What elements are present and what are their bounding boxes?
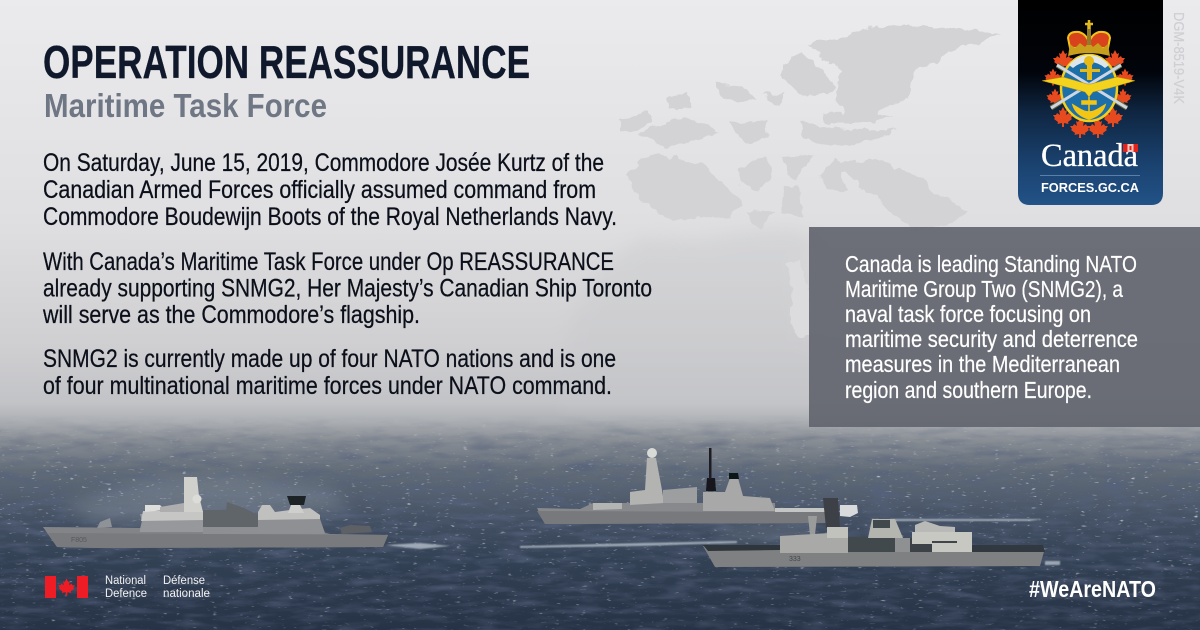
hull number: F805 bbox=[71, 537, 87, 544]
logo: National Defence signature bbox=[45, 575, 210, 600]
text block: command assumed bbox=[43, 149, 617, 231]
wordmark: Canada: Canada bbox=[1041, 138, 1138, 174]
text block: flagship bbox=[42, 248, 652, 329]
panel: SNMG2 callout: naval task force focusing on bbox=[845, 301, 1091, 327]
web address: FORCES.GC.CA bbox=[1041, 180, 1140, 195]
hull number: 333 bbox=[789, 556, 801, 563]
background: misty sky and sea bbox=[0, 203, 1200, 630]
document number: DGM-8519-V4K bbox=[1170, 12, 1187, 104]
panel: SNMG2 callout: Canada is leading Standing NATO bbox=[845, 251, 1137, 277]
ship: Dutch frigate F805 bbox=[43, 477, 388, 548]
sea foam patches bbox=[60, 475, 820, 540]
logo: National Defence signature: Defence bbox=[105, 588, 147, 600]
text block: SNMG2 composition bbox=[43, 345, 616, 400]
panel: SNMG2 callout: Maritime Group Two (SNMG2), a bbox=[845, 276, 1123, 302]
text block: command assumed: Canadian Armed Forces officially assumed command from bbox=[43, 176, 596, 204]
ship: British destroyer D37 bbox=[537, 448, 827, 524]
icon: crest shield bbox=[1042, 55, 1135, 121]
icon: crown bbox=[1068, 20, 1110, 56]
logo: National Defence signature: National bbox=[105, 575, 146, 587]
panel: SNMG2 callout: region and southern Europe. bbox=[845, 377, 1092, 403]
text block: flagship: already supporting SNMG2, Her Majesty’s Canadian Ship Toronto bbox=[43, 274, 652, 302]
icon: maple leaf wreath bbox=[1044, 50, 1134, 138]
text block: SNMG2 composition: of four multinational maritime forces under NATO command. bbox=[43, 372, 612, 400]
wake lines bbox=[385, 519, 1060, 565]
panel: SNMG2 callout: maritime security and deterrence bbox=[845, 326, 1138, 352]
panel: SNMG2 callout: measures in the Mediterranean bbox=[845, 351, 1120, 377]
panel: SNMG2 callout bbox=[809, 227, 1200, 427]
title: OPERATION REASSURANCE bbox=[43, 36, 530, 88]
logo: Canadian Armed Forces badge bbox=[1018, 0, 1163, 205]
icon: Canadian flag bbox=[45, 576, 88, 598]
text block: flagship: will serve as the Commodore’s flagship. bbox=[42, 301, 420, 329]
logo: National Defence signature: Défense bbox=[163, 575, 205, 587]
text block: SNMG2 composition: SNMG2 is currently made up of four NATO nations and is one bbox=[43, 345, 616, 373]
map of northern Canada bbox=[560, 25, 1003, 410]
text block: flagship: With Canada’s Maritime Task Force under Op REASSURANCE bbox=[43, 248, 614, 276]
hashtag: #WeAreNATO bbox=[1029, 576, 1156, 602]
subtitle: Maritime Task Force bbox=[44, 87, 327, 124]
text block: command assumed: On Saturday, June 15, 2019, Commodore Josée Kurtz of the bbox=[43, 149, 604, 177]
ship: HMCS Toronto 333 bbox=[703, 498, 1045, 567]
logo: National Defence signature: nationale bbox=[163, 588, 210, 600]
text block: command assumed: Commodore Boudewijn Boots of the Royal Netherlands Navy. bbox=[43, 203, 617, 231]
